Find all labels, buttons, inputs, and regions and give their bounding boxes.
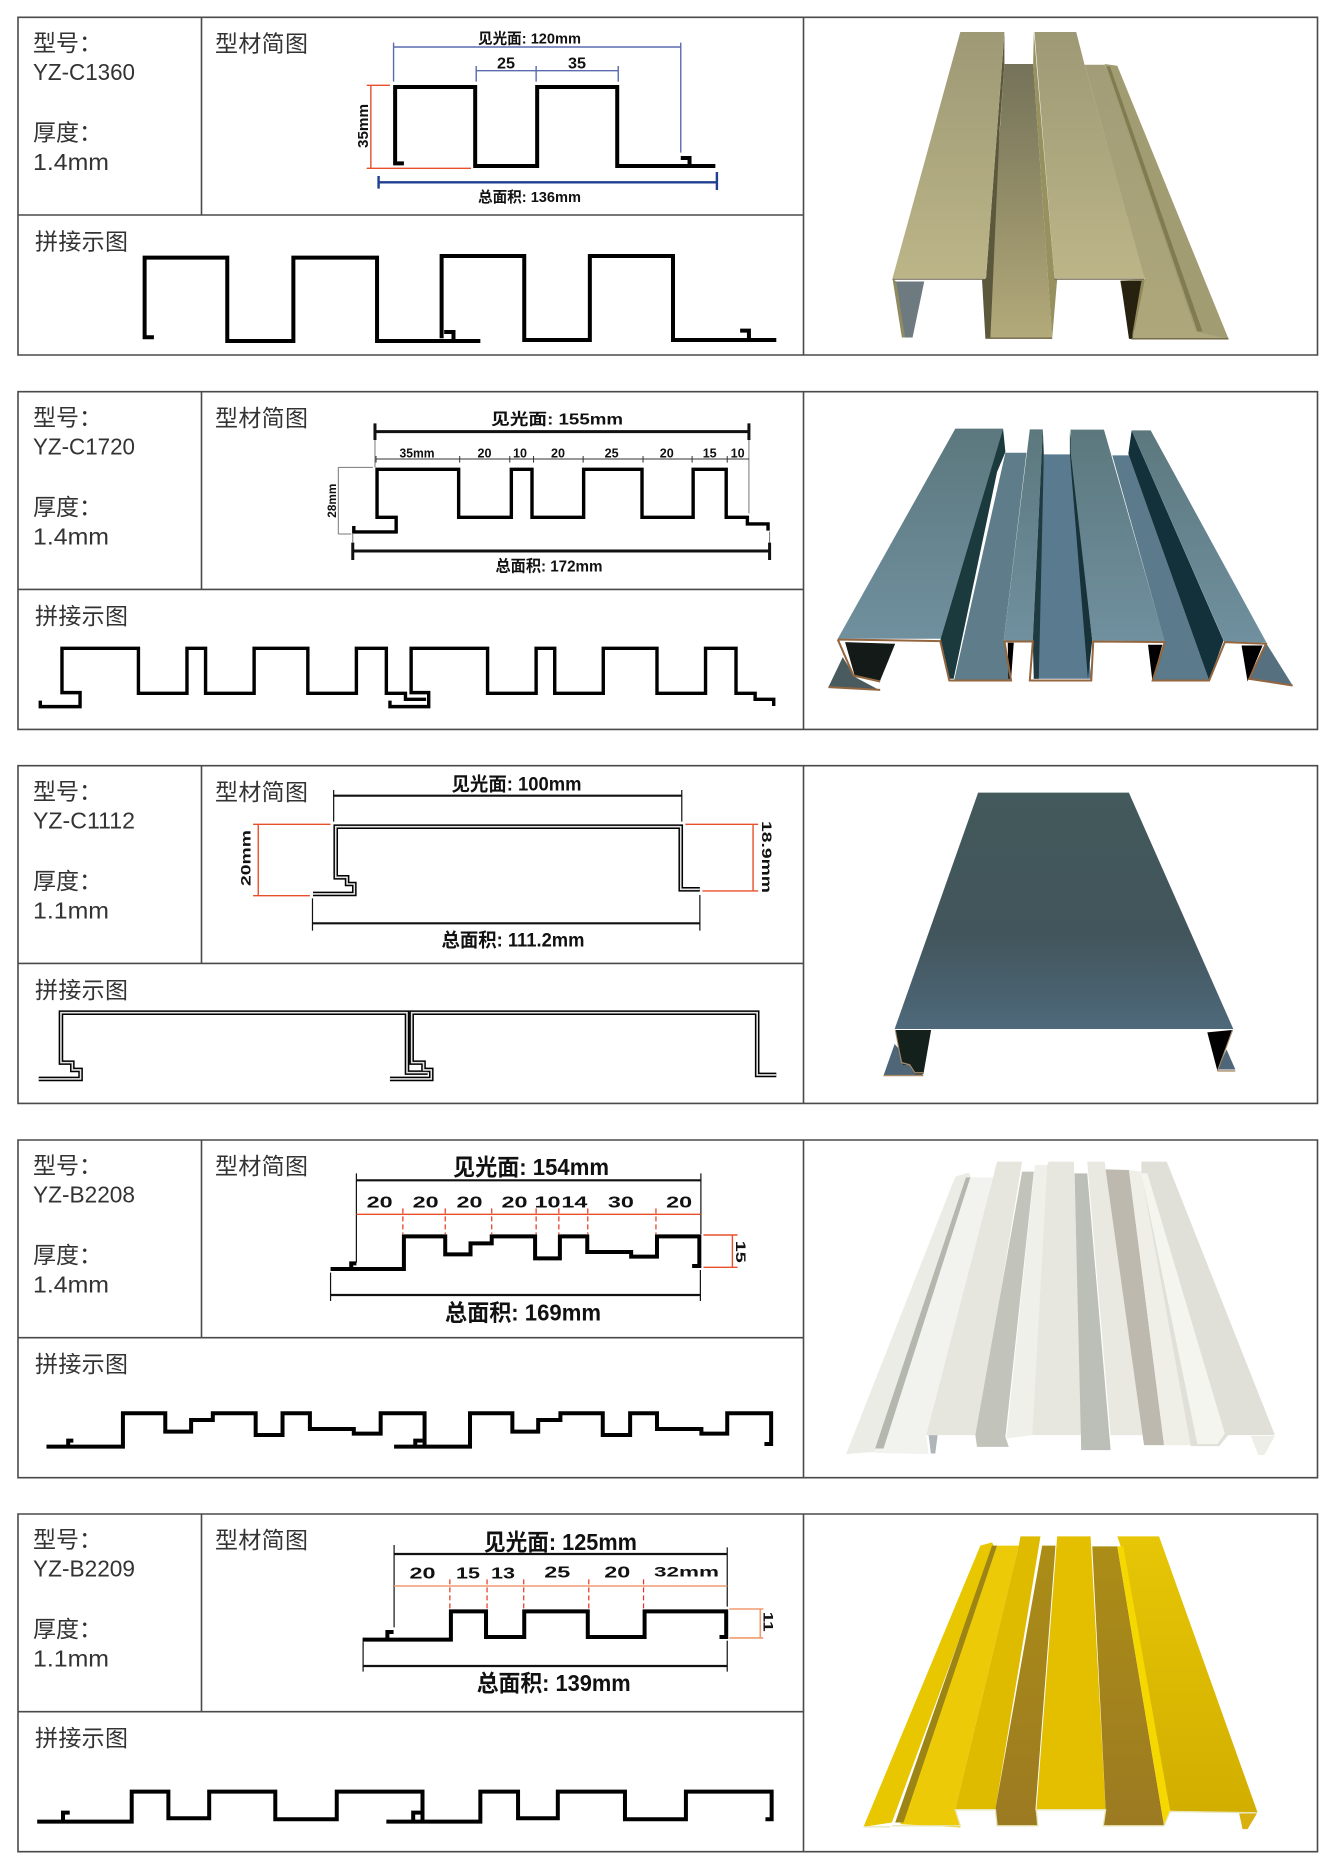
- row 4: YZ-B2208: [18, 1140, 1318, 1478]
- profile diagram: 20mm: [238, 830, 254, 886]
- model and thickness text: 型号：: [33, 30, 102, 56]
- heading: joint drawing: 拼接示图: [35, 1725, 128, 1751]
- profile diagram: 25: [544, 1565, 571, 1582]
- panel frame: [18, 1514, 1318, 1852]
- model and thickness text: 1.1mm: [33, 1646, 109, 1672]
- model and thickness text: YZ-C1112: [33, 807, 135, 833]
- model and thickness text: 型号：: [33, 778, 102, 804]
- profile diagram: 20: [551, 445, 565, 460]
- heading: profile drawing: 型材简图: [215, 30, 308, 56]
- profile diagram: 35mm: [400, 445, 434, 460]
- profile diagram: 20: [478, 445, 492, 460]
- joint diagram: [145, 256, 776, 341]
- profile diagram: 见光面: 154mm: [453, 1154, 609, 1180]
- profile diagram: 15: [703, 445, 717, 460]
- profile diagram: 见光面: 100mm: [452, 774, 582, 796]
- model and thickness text: 厚度：: [33, 1616, 102, 1642]
- heading: profile drawing: 型材简图: [215, 779, 308, 805]
- photo: champagne panel: [893, 32, 1229, 339]
- panel frame: [18, 392, 1318, 729]
- heading: joint drawing: 拼接示图: [35, 603, 128, 629]
- heading: profile drawing: 型材简图: [215, 405, 308, 431]
- profile diagram: 20: [502, 1194, 528, 1211]
- model and thickness text: 1.4mm: [33, 523, 109, 549]
- profile diagram: 13: [491, 1565, 516, 1582]
- joint diagram: [40, 648, 774, 707]
- heading: profile drawing: 型材简图: [215, 1527, 308, 1553]
- profile diagram: 28mm: [327, 484, 339, 518]
- photo: white panel: [846, 1162, 1275, 1455]
- profile diagram: 20: [410, 1565, 436, 1582]
- heading: joint drawing: 拼接示图: [35, 228, 128, 254]
- model and thickness text: [33, 30, 135, 175]
- profile diagram: 总面积: 136mm: [478, 188, 581, 206]
- profile diagram: 总面积: 172mm: [496, 557, 602, 576]
- profile diagram: 15: [456, 1565, 481, 1582]
- profile diagram: 25: [605, 445, 619, 460]
- model and thickness text: 1.4mm: [33, 149, 109, 175]
- profile diagram: 35: [568, 56, 586, 72]
- profile diagram: 10: [534, 1194, 560, 1211]
- profile diagram: 总面积: 139mm: [477, 1670, 631, 1696]
- profile diagram: 10: [731, 445, 745, 460]
- profile diagram: 25: [497, 56, 515, 72]
- profile diagram: 30: [608, 1194, 634, 1211]
- profile diagram: 10: [513, 445, 527, 460]
- profile diagram: 14: [561, 1194, 588, 1211]
- profile diagram: 见光面: 155mm: [491, 410, 623, 428]
- model and thickness text: 厚度：: [33, 868, 102, 894]
- profile diagram: 20: [367, 1194, 393, 1211]
- model and thickness text: [33, 404, 135, 549]
- photo: blue-grey panel: [828, 429, 1293, 690]
- model and thickness text: [33, 778, 135, 923]
- row 3: YZ-C1112: [18, 766, 1318, 1103]
- profile diagram: 35mm: [355, 104, 372, 148]
- profile diagram: [238, 774, 775, 952]
- model and thickness text: 型号：: [33, 404, 102, 430]
- model and thickness text: [33, 1153, 135, 1298]
- profile diagram: 11: [760, 1612, 776, 1632]
- profile diagram: 15: [733, 1241, 749, 1263]
- model and thickness text: 厚度：: [33, 1242, 102, 1268]
- panel frame: [18, 17, 1318, 355]
- profile diagram: 20: [456, 1194, 482, 1211]
- model and thickness text: 厚度：: [33, 120, 102, 146]
- joint diagram: [37, 1792, 772, 1822]
- model and thickness text: 1.1mm: [33, 897, 109, 923]
- model and thickness text: YZ-C1360: [33, 59, 135, 85]
- profile diagram: 20: [666, 1194, 692, 1211]
- profile diagram: [331, 1154, 749, 1326]
- profile diagram: 20: [604, 1565, 630, 1582]
- model and thickness text: 型号：: [33, 1153, 102, 1179]
- profile diagram: [363, 1529, 776, 1696]
- row 1: YZ-C1360: [18, 17, 1318, 355]
- model and thickness text: YZ-C1720: [33, 433, 135, 459]
- joint diagram: [46, 1413, 771, 1447]
- profile diagram: 总面积: 169mm: [445, 1300, 601, 1326]
- model and thickness text: 型号：: [33, 1527, 102, 1553]
- profile diagram: 20: [660, 445, 674, 460]
- heading: profile drawing: 型材简图: [215, 1153, 308, 1179]
- photo: dark slate panel: [883, 793, 1235, 1076]
- photo: yellow panel: [863, 1536, 1258, 1829]
- profile diagram: 32mm: [654, 1564, 719, 1580]
- model and thickness text: [33, 1527, 135, 1672]
- joint diagram: [39, 1013, 776, 1079]
- model and thickness text: 1.4mm: [33, 1272, 109, 1298]
- profile diagram: [327, 410, 770, 576]
- heading: joint drawing: 拼接示图: [35, 977, 128, 1003]
- model and thickness text: YZ-B2208: [33, 1182, 135, 1208]
- row 5: YZ-B2209: [18, 1514, 1318, 1852]
- profile diagram: 见光面: 120mm: [478, 30, 581, 48]
- profile diagram: 18.9mm: [759, 821, 775, 893]
- model and thickness text: YZ-B2209: [33, 1556, 135, 1582]
- profile diagram: 20: [413, 1194, 439, 1211]
- panel frame: [18, 766, 1318, 1103]
- model and thickness text: 厚度：: [33, 494, 102, 520]
- profile diagram: [355, 30, 717, 206]
- heading: joint drawing: 拼接示图: [35, 1351, 128, 1377]
- panel frame: [18, 1140, 1318, 1478]
- profile diagram: 总面积: 111.2mm: [442, 930, 584, 952]
- row 2: YZ-C1720: [18, 392, 1318, 729]
- profile diagram: 见光面: 125mm: [484, 1529, 637, 1555]
